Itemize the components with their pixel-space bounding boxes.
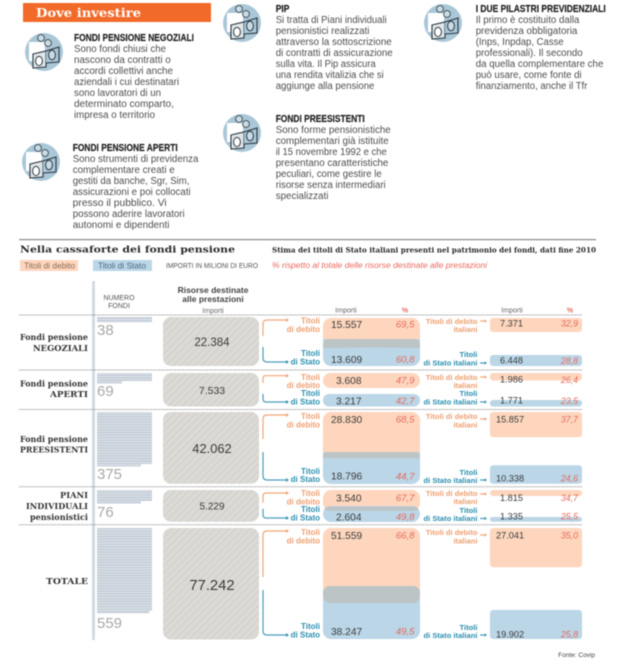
bars: titoli totali — [323, 490, 420, 524]
bars: titoli italiani: 25,8 — [560, 630, 578, 640]
text block: aperti — [73, 154, 199, 231]
legend: Titoli di debito — [24, 262, 76, 270]
labels: di debito — [287, 381, 320, 390]
column headers: Importi — [202, 308, 224, 315]
row label: NEGOZIALI — [33, 343, 88, 353]
text block: negoziali — [74, 44, 179, 121]
resources panel: 7.533 — [199, 385, 225, 397]
fund count grid: 559 — [97, 615, 122, 632]
text block: pilastri: previdenza obbligatoria — [476, 26, 578, 37]
labels: di debito — [287, 420, 320, 430]
text block: aperti: possono aderire lavoratori — [73, 209, 185, 220]
labels: di Stato — [291, 358, 320, 366]
bars: titoli italiani: 1.335 — [500, 511, 523, 521]
arrows — [263, 491, 289, 520]
text block: pilastri: finanziamento, anche il Tfr — [476, 81, 588, 92]
bars: titoli totali: 49,8 — [396, 512, 415, 523]
labels italiani: Titoli di debito — [426, 528, 478, 537]
bars: titoli totali — [323, 373, 420, 408]
fund count grid: 375 — [97, 466, 122, 483]
icon: savings frames — [223, 4, 261, 42]
icon: savings frames — [22, 143, 60, 181]
text block: PIP — [276, 15, 393, 92]
labels italiani: Titoli — [460, 389, 478, 398]
row label — [20, 378, 88, 399]
column headers — [103, 285, 574, 315]
resources panel — [163, 528, 259, 640]
bars: titoli totali: 38.247 — [331, 627, 362, 638]
labels: Titoli — [301, 349, 320, 358]
bars: titoli italiani: 10.338 — [496, 474, 524, 484]
legend: IMPORTI IN MILIONI DI EURO — [166, 263, 259, 270]
text block: negoziali: accordi collettivi anche — [74, 66, 173, 77]
bars: titoli totali — [323, 318, 420, 366]
labels: di Stato — [291, 475, 320, 484]
bars: titoli italiani: 1.771 — [500, 396, 523, 406]
resources panel: 5.229 — [199, 502, 225, 512]
row: Piani individuali pensionistici — [26, 489, 582, 524]
labels: di debito — [287, 325, 320, 334]
labels italiani: italiani — [453, 497, 478, 506]
heading banner: Dove investire: Dove investire — [36, 6, 141, 20]
arrows — [263, 529, 289, 637]
bars: titoli italiani: 34,7 — [561, 493, 579, 503]
text block: PIP: sulla vita. Il Pip assicura — [276, 59, 376, 70]
labels italiani: Titoli — [460, 350, 478, 359]
labels: Titoli — [301, 373, 320, 382]
row label: APERTI — [49, 389, 88, 399]
labels italiani: Titoli di debito — [426, 317, 478, 326]
chart subtitle: Stima dei titoli di Stato italiani presenti nel patrimonio dei fondi, dati fine 2010 — [272, 246, 596, 254]
labels: Titoli — [301, 505, 320, 514]
bars: titoli totali: 44,7 — [396, 472, 415, 482]
row: Fondi pensione preesistenti — [20, 412, 582, 485]
text block: negoziali: sono lavoratori di un — [74, 88, 161, 99]
labels italiani: italiani — [453, 536, 478, 546]
bars: titoli totali: 69,5 — [396, 320, 415, 330]
labels: Titoli — [301, 622, 320, 631]
fund count grid: 76 — [97, 504, 114, 521]
fund count grid — [97, 373, 152, 400]
bars: titoli italiani: 7.371 — [500, 318, 523, 328]
column headers: Importi — [501, 308, 523, 314]
text block: PIP: una rendita vitalizia che si — [276, 70, 384, 81]
bars: titoli italiani — [490, 373, 582, 406]
bars: titoli totali: 68,5 — [396, 414, 415, 426]
legend: % rispetto al totale delle risorse destinate alle prestazioni — [272, 261, 487, 270]
labels italiani: di Stato italiani — [423, 358, 478, 368]
panel: Fondi preesistenti — [223, 113, 391, 202]
text block: negoziali: determinato comparto, — [74, 99, 174, 110]
row label: TOTALE — [46, 576, 88, 586]
row label — [20, 332, 88, 353]
row label: Fondi pensione — [20, 332, 88, 342]
labels — [287, 528, 320, 640]
bars: titoli totali: 3.540 — [336, 494, 362, 504]
arrows — [263, 413, 289, 482]
labels italiani: Titoli — [460, 506, 478, 515]
resources panel: 77.242 — [189, 578, 235, 594]
bars: titoli totali: 15.557 — [331, 320, 362, 331]
bars: titoli totali: 3.217 — [336, 396, 362, 408]
arrows — [263, 374, 289, 404]
fund count grid: 69 — [97, 383, 114, 400]
bars: titoli italiani: 19.902 — [496, 630, 524, 640]
bars: titoli italiani: 23,5 — [560, 396, 578, 406]
text block: negoziali: aziendali i cui destinatari — [74, 77, 179, 88]
row: Fondi pensione aperti — [20, 373, 582, 408]
resources panel — [163, 490, 259, 522]
labels: Titoli — [301, 467, 320, 476]
fund count grid — [97, 412, 152, 483]
row label: pensionistici — [30, 512, 88, 522]
labels italiani: Titoli di debito — [426, 373, 478, 382]
fund count grid — [97, 317, 152, 339]
text block: preesistenti: Sono forme pensionistiche — [276, 125, 391, 136]
chart title: Nella cassaforte dei fondi pensione — [20, 244, 235, 256]
text block: aperti: assicurazioni e poi collocati — [73, 187, 191, 198]
column headers: NUMERO — [103, 295, 135, 302]
panel: Fondi pensione aperti — [22, 142, 199, 231]
bars: titoli italiani — [490, 490, 582, 522]
bars: titoli italiani: 37,7 — [561, 414, 579, 424]
labels italiani — [423, 528, 487, 640]
labels — [287, 412, 320, 484]
text block: preesistenti: specializzati — [276, 191, 328, 202]
bars: titoli totali: 18.796 — [331, 472, 362, 483]
labels: di Stato — [291, 514, 320, 522]
text block: pilastri — [476, 15, 604, 92]
bars: titoli italiani: 35,0 — [561, 530, 578, 540]
labels italiani: Titoli — [460, 468, 478, 477]
labels italiani — [423, 373, 487, 406]
bars: titoli totali: 2.604 — [336, 512, 362, 524]
text block: preesistenti: complementari già istituite — [276, 136, 389, 147]
text block: PIP: aggiunge alla pensione — [276, 81, 375, 92]
row label — [26, 490, 88, 522]
resources panel — [163, 373, 259, 406]
bars: titoli totali: 67,7 — [396, 493, 415, 504]
heading: preesistenti: FONDI PREESISTENTI — [276, 113, 365, 125]
bars: titoli totali: 3.608 — [336, 376, 362, 387]
text block: aperti: gestiti da banche, Sgr, Sim, — [73, 176, 189, 187]
bars: titoli totali — [323, 528, 420, 639]
text block: preesistenti: il 15 novembre 1992 e che — [276, 147, 387, 158]
bars: titoli italiani — [490, 528, 582, 640]
text block: negoziali: Sono fondi chiusi che — [74, 44, 166, 55]
column headers: Importi — [335, 308, 357, 314]
labels italiani: Titoli di debito — [426, 489, 478, 498]
column headers: alle prestazioni — [182, 294, 244, 304]
column headers: % — [402, 308, 409, 314]
resources panel: 22.384 — [194, 337, 230, 349]
bars: titoli italiani: 27.041 — [496, 530, 524, 540]
bars: titoli totali: 47,9 — [396, 376, 415, 386]
column headers: FONDI — [108, 303, 130, 310]
source note: Fonte: Covip — [558, 652, 595, 659]
labels italiani: Titoli di debito — [426, 412, 478, 421]
labels italiani: di Stato italiani — [423, 514, 478, 523]
labels italiani: di Stato italiani — [423, 398, 478, 406]
labels italiani: di Stato italiani — [423, 476, 478, 485]
text block: preesistenti: presentano caratteristiche — [276, 158, 389, 169]
row label — [20, 434, 88, 454]
row: Totale — [46, 528, 582, 640]
labels — [287, 373, 320, 406]
labels italiani: italiani — [453, 381, 478, 390]
bars: titoli totali: 13.609 — [331, 355, 362, 366]
bars: titoli italiani: 26,4 — [560, 375, 578, 385]
text block: preesistenti: risorse senza intermediari — [276, 180, 386, 191]
bars: titoli totali: 51.559 — [331, 531, 362, 542]
labels italiani — [423, 489, 487, 523]
resources panel — [163, 412, 259, 484]
bars: titoli italiani: 28,8 — [560, 356, 578, 366]
labels: Titoli — [301, 489, 320, 498]
column headers: Risorse destinate — [178, 285, 249, 295]
bars: titoli italiani: 15.857 — [496, 414, 524, 424]
text block: preesistenti: peculiari, come gestire le — [276, 169, 382, 180]
text block: PIP: di contratti di assicurazione — [276, 48, 393, 59]
bars: titoli italiani: 25,5 — [560, 512, 578, 522]
heading: negoziali: FONDI PENSIONE NEGOZIALI — [74, 32, 194, 44]
labels italiani — [423, 317, 487, 368]
labels: di Stato — [291, 398, 320, 406]
resources panel — [163, 317, 259, 366]
bars: titoli totali: 60,8 — [396, 354, 415, 366]
labels italiani: italiani — [453, 325, 478, 334]
icon: savings frames — [424, 4, 462, 42]
legend — [20, 260, 487, 271]
text block: pilastri: può usare, come fonte di — [476, 70, 582, 81]
column headers: % — [567, 308, 574, 314]
labels: Titoli — [301, 389, 320, 398]
fund count grid — [97, 490, 152, 521]
labels: Titoli — [301, 412, 320, 421]
row label: Fondi pensione — [20, 378, 88, 388]
text block: aperti: Sono strumenti di previdenza — [73, 154, 199, 165]
legend: Titoli di Stato — [98, 262, 147, 270]
panel: PIP — [223, 3, 393, 92]
row: Fondi pensione negoziali — [20, 316, 582, 368]
labels italiani: Titoli — [460, 623, 478, 632]
labels: Titoli — [301, 528, 320, 537]
text block: negoziali: impresa o territorio — [74, 110, 155, 121]
bars: titoli italiani: 6.448 — [500, 356, 523, 366]
bars: titoli italiani: 32,9 — [561, 318, 578, 328]
row label: INDIVIDUALI — [26, 501, 88, 511]
text block: pilastri: Il primo è costituito dalla — [476, 15, 580, 26]
text block: PIP: pensionistici realizzati — [276, 26, 369, 37]
labels: di debito — [287, 536, 320, 546]
bars: titoli totali: 66,8 — [396, 530, 415, 542]
text block: pilastri: da quella complementare che — [476, 59, 604, 70]
labels: di Stato — [291, 630, 320, 640]
labels: Titoli — [301, 316, 320, 326]
text block: PIP: Si tratta di Piani individuali — [276, 15, 387, 26]
bars: titoli italiani: 24,6 — [560, 474, 578, 484]
panel: I due pilastri previdenziali — [424, 3, 606, 92]
text block: pilastri: professionali). Il secondo — [476, 48, 583, 59]
labels — [287, 489, 320, 522]
text block: aperti: autonomi e dipendenti — [73, 220, 169, 231]
text block: aperti: presso il pubblico. Vi — [73, 198, 167, 209]
text block: aperti: complementare creati e — [73, 165, 175, 176]
resources panel: 42.062 — [192, 441, 232, 456]
heading: PIP: PIP — [276, 3, 289, 15]
panel: Fondi pensione negoziali — [25, 32, 194, 121]
heading: aperti: FONDI PENSIONE APERTI — [73, 142, 178, 154]
bars: titoli totali: 49,5 — [396, 626, 415, 638]
bars: titoli totali: 42,7 — [396, 396, 415, 407]
text block: preesistenti — [276, 125, 391, 202]
bars: titoli totali: 28.830 — [331, 415, 362, 426]
bars: titoli italiani — [490, 318, 582, 366]
labels italiani — [423, 412, 487, 485]
text block: PIP: attraverso la sottoscrizione — [276, 37, 392, 48]
labels: di debito — [287, 498, 320, 506]
labels italiani: di Stato italiani — [423, 631, 478, 640]
heading banner: Dove investire — [23, 3, 211, 22]
fund count grid — [97, 528, 152, 632]
row label: PREESISTENTI — [20, 444, 88, 454]
labels — [287, 316, 320, 366]
labels italiani: italiani — [453, 420, 478, 430]
text block: negoziali: nascono da contratti o — [74, 55, 171, 66]
icon: savings frames — [223, 114, 261, 152]
bars: titoli italiani — [490, 412, 582, 484]
icon: savings frames — [25, 33, 63, 71]
bars: titoli italiani: 1.815 — [500, 493, 523, 503]
arrows — [263, 318, 289, 364]
row label: PIANI — [60, 490, 88, 500]
text block: pilastri: (Inps, Inpdap, Casse — [476, 37, 564, 48]
row label: Fondi pensione — [20, 434, 88, 444]
fund count grid: 38 — [97, 322, 114, 339]
bars: titoli totali — [323, 412, 420, 484]
bars: titoli italiani: 1.986 — [500, 374, 523, 384]
